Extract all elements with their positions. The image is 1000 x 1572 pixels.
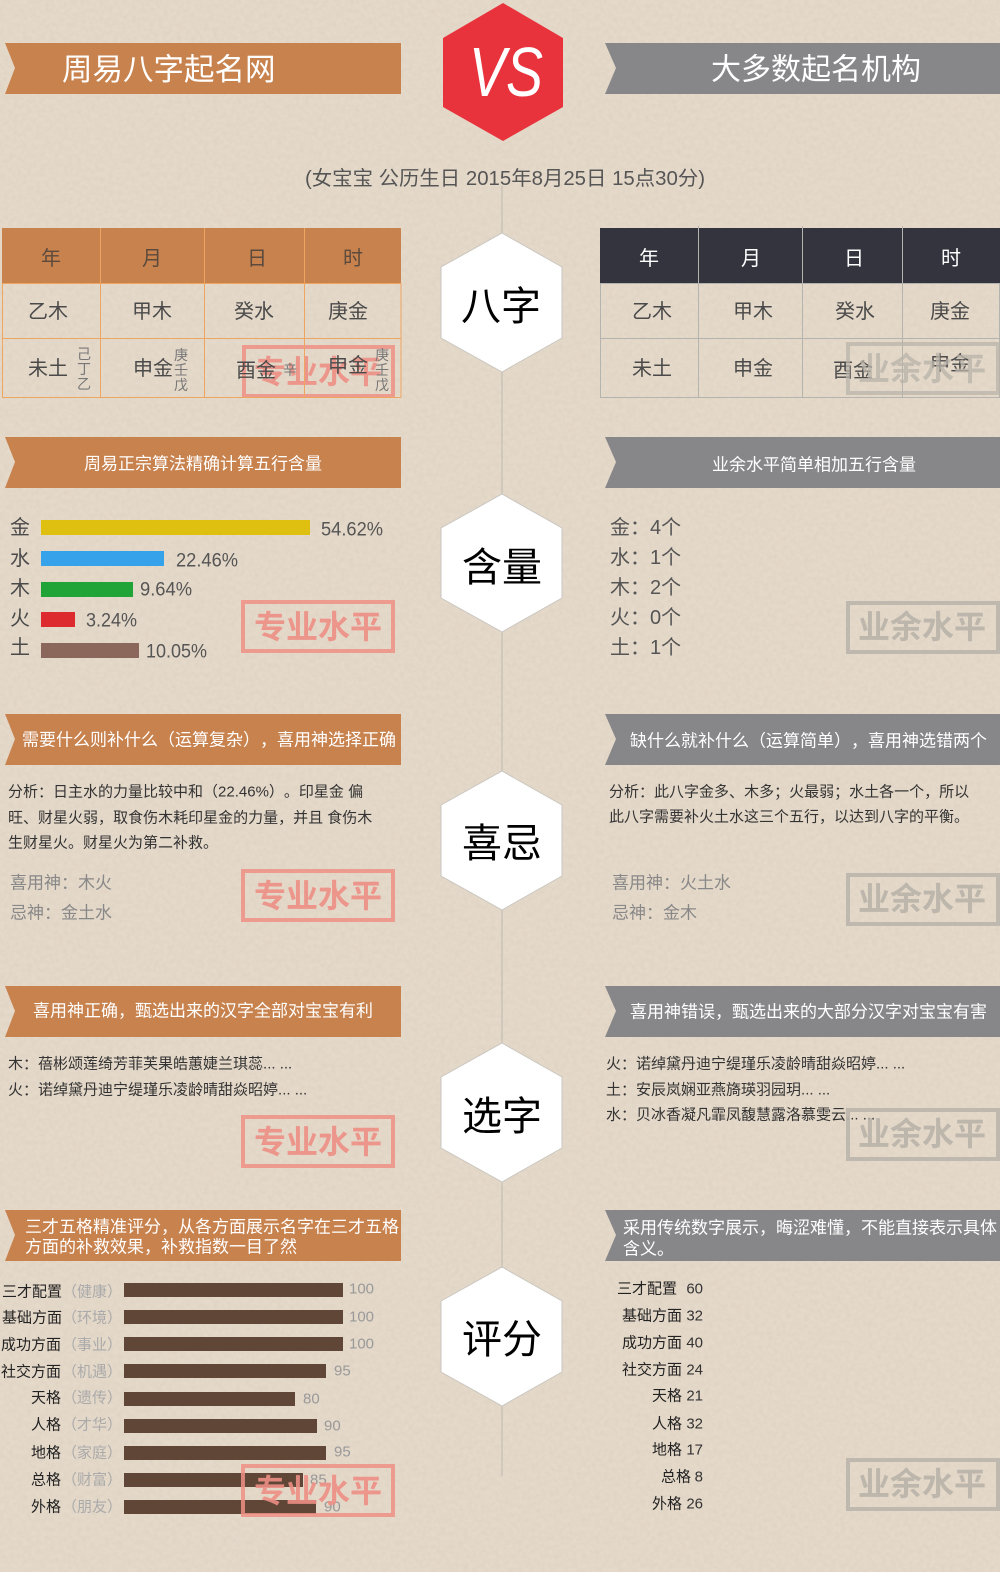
hexagon: 含量: 含量 bbox=[462, 546, 542, 590]
bar chart: five elements percent: 54.62% bbox=[321, 520, 383, 540]
list: traditional numeric scores: 三才配置 bbox=[617, 1280, 677, 1298]
panel: left bazi table: 乙 bbox=[77, 376, 91, 392]
stamp: 专业水平 bazi bbox=[244, 347, 393, 396]
panel: left bazi table: 时 bbox=[343, 247, 363, 270]
bar chart: five elements percent: 10.05% bbox=[146, 642, 207, 662]
banner: 需要什么则补什么: 需要什么则补什么（运算复杂），喜用神选择正确 bbox=[22, 730, 396, 750]
panel: left bazi table: 癸水 bbox=[234, 300, 274, 323]
panel: left bazi table: 庚 bbox=[174, 347, 188, 363]
list: traditional numeric scores: 天格 bbox=[652, 1388, 682, 1404]
bar chart: name scores: 地格 bbox=[31, 1444, 61, 1462]
bar chart: name scores: 100 bbox=[349, 1308, 374, 1326]
banner: 三才五格精准评分: 方面的补救效果，补救指数一目了然 bbox=[25, 1238, 297, 1256]
bar chart: name scores: （遗传） bbox=[62, 1390, 122, 1406]
text block: left analysis: 生财星火。财星火为第二补救。 bbox=[8, 834, 218, 852]
panel: right bazi table: 癸水 bbox=[835, 300, 875, 323]
bar chart: five elements percent: 金 bbox=[10, 516, 30, 539]
bar chart: name scores: 85 bbox=[310, 1472, 327, 1488]
subtitle: birth date: (女宝宝 公历生日 2015年8月25日 15点30分) bbox=[305, 167, 705, 190]
stamp: 业余水平 content: 业余水平 bbox=[858, 609, 986, 645]
banner: 喜用神正确 bbox=[5, 986, 401, 1037]
panel: left bazi table: 壬 bbox=[174, 362, 188, 378]
hexagon: 含量 bbox=[441, 494, 562, 632]
stamp: 专业水平 content: 专业水平 bbox=[254, 609, 382, 645]
panel: left bazi table bbox=[2, 228, 401, 398]
panel: right bazi table: 月 bbox=[741, 248, 761, 270]
list: traditional numeric scores: 24 bbox=[686, 1362, 703, 1378]
bar chart: name scores: （环境） bbox=[62, 1308, 122, 1326]
text block: left name characters: 木：蓓彬颂莲绮芳菲芙果皓蕙婕兰琪蕊... ... bbox=[8, 1056, 292, 1072]
panel: left bazi table: 申金 bbox=[133, 357, 173, 380]
bar chart: name scores: 90 bbox=[324, 1418, 341, 1434]
bar chart: name scores: （朋友） bbox=[62, 1498, 122, 1516]
bar chart: name scores: 100 bbox=[349, 1336, 374, 1352]
bar chart: name scores bbox=[1, 1280, 374, 1516]
panel: right bazi table: 申金 bbox=[930, 352, 970, 375]
hexagon: 八字: 八字 bbox=[461, 285, 541, 329]
panel: left bazi table: 丁 bbox=[77, 361, 91, 377]
stamp: 专业水平 bazi: 专业水平 bbox=[254, 354, 382, 390]
bar chart: name scores: （事业） bbox=[62, 1336, 122, 1354]
bar chart: name scores: （财富） bbox=[62, 1470, 122, 1488]
bar chart: name scores: 95 bbox=[334, 1362, 351, 1380]
bar chart: five elements percent: 火 bbox=[10, 608, 30, 630]
bar chart: name scores: 人格 bbox=[31, 1416, 61, 1434]
stamp: 业余水平 bazi bbox=[848, 344, 998, 393]
panel: left bazi table: 庚金 bbox=[328, 300, 368, 323]
text block: left analysis: 分析：日主水的力量比较中和（22.46%）。印星金 偏 bbox=[8, 782, 363, 800]
text block: right name characters: 土：安辰岚娴亚燕旖瑛羽园玥... ... bbox=[606, 1082, 830, 1098]
stamp: 业余水平 characters: 业余水平 bbox=[858, 1116, 986, 1152]
bar chart: five elements percent bbox=[10, 516, 383, 662]
hexagon: 喜忌: 喜忌 bbox=[462, 822, 542, 866]
banner: 周易正宗算法 bbox=[5, 437, 401, 488]
bar chart: five elements percent: 土 bbox=[10, 636, 30, 659]
bar chart: five elements percent: 木 bbox=[10, 577, 30, 600]
panel: left bazi table: 未土 bbox=[28, 357, 68, 380]
banner: 三才五格精准评分: 三才五格精准评分，从各方面展示名字在三才五格 bbox=[25, 1218, 399, 1236]
list: traditional numeric scores: 40 bbox=[686, 1334, 703, 1352]
list: simple five element counts bbox=[610, 516, 681, 659]
list: traditional numeric scores: 地格 bbox=[652, 1442, 682, 1458]
stamp: 专业水平 characters bbox=[243, 1117, 393, 1166]
bar chart: name scores: 基础方面 bbox=[2, 1310, 62, 1326]
header banner: 大多数起名机构 bbox=[605, 43, 1000, 94]
banner: 喜用神错误 bbox=[605, 986, 1000, 1037]
panel: left bazi table: 壬 bbox=[375, 362, 389, 378]
banner: 业余水平简单相加: 业余水平简单相加五行含量 bbox=[712, 456, 916, 474]
bar chart: name scores: 100 bbox=[349, 1280, 374, 1298]
text block: right name characters: 火：诺绰黛丹迪宁缇瑾乐凌龄晴甜焱昭婷... ... bbox=[606, 1056, 905, 1072]
hexagon: 评分 bbox=[441, 1267, 562, 1406]
list: traditional numeric scores: 基础方面 bbox=[622, 1308, 682, 1324]
list: traditional numeric scores: 成功方面 bbox=[622, 1334, 682, 1352]
text block: right analysis: 分析：此八字金多、木多；火最弱；水土各一个，所以 bbox=[609, 784, 969, 800]
list: simple five element counts: 木：2个 bbox=[610, 576, 681, 599]
text block: right analysis: 忌神：金木 bbox=[612, 904, 697, 922]
list: traditional numeric scores: 总格 bbox=[661, 1468, 691, 1486]
text block: left analysis bbox=[8, 782, 372, 922]
stamp: 业余水平 bazi: 业余水平 bbox=[858, 351, 986, 387]
panel: left bazi table: 月 bbox=[142, 248, 162, 270]
bar chart: name scores: 社交方面 bbox=[1, 1362, 61, 1380]
text block: left analysis: 忌神：金土水 bbox=[10, 904, 112, 922]
panel: left bazi table: 申金 bbox=[328, 354, 368, 377]
list: traditional numeric scores: 21 bbox=[686, 1388, 703, 1404]
panel: right bazi table: 甲木 bbox=[733, 300, 773, 323]
bar chart: name scores: （才华） bbox=[62, 1416, 122, 1434]
stamp: 业余水平 scores bbox=[848, 1460, 998, 1509]
bar chart: five elements percent: 22.46% bbox=[176, 550, 238, 572]
text block: right analysis: 喜用神：火土水 bbox=[612, 874, 731, 892]
panel: right bazi table: 日 bbox=[844, 248, 864, 270]
stamp: 专业水平 analysis bbox=[243, 871, 393, 920]
panel: right bazi table bbox=[600, 226, 1000, 398]
stamp: 业余水平 analysis: 业余水平 bbox=[858, 881, 986, 917]
panel: right bazi table: 庚金 bbox=[930, 300, 970, 323]
bar chart: name scores: 三才配置 bbox=[2, 1284, 62, 1300]
banner: 采用传统数字展示 bbox=[605, 1210, 1000, 1261]
hexagon: 评分: 评分 bbox=[462, 1318, 542, 1362]
hexagon: 喜忌 bbox=[441, 771, 562, 910]
stamp: 业余水平 content bbox=[848, 603, 998, 652]
bar chart: five elements percent: 水 bbox=[10, 547, 30, 570]
list: simple five element counts: 土：1个 bbox=[610, 636, 681, 659]
hexagon: 选字: 选字 bbox=[462, 1095, 542, 1139]
text block: right analysis: 此八字需要补火土水这三个五行，以达到八字的平衡。 bbox=[609, 808, 969, 826]
panel: left bazi table: 乙木 bbox=[28, 300, 68, 323]
bar chart: name scores: 总格 bbox=[31, 1472, 61, 1488]
header banner: 周易八字起名网 bbox=[5, 43, 401, 94]
bar chart: name scores: （家庭） bbox=[62, 1444, 122, 1462]
panel: right bazi table: 酉金 bbox=[833, 359, 873, 382]
panel: left bazi table: 年 bbox=[41, 247, 61, 270]
header banner: 大多数起名机构: 大多数起名机构 bbox=[711, 54, 921, 86]
VS red hexagon badge bbox=[443, 3, 563, 141]
list: simple five element counts: 金：4个 bbox=[610, 516, 681, 539]
list: traditional numeric scores: 60 bbox=[686, 1280, 703, 1298]
bar chart: name scores: （健康） bbox=[62, 1284, 122, 1300]
list: traditional numeric scores: 32 bbox=[686, 1416, 703, 1432]
list: traditional numeric scores: 社交方面 bbox=[622, 1360, 682, 1378]
list: traditional numeric scores: 人格 bbox=[652, 1416, 682, 1432]
bar chart: name scores: 80 bbox=[303, 1390, 320, 1408]
bar chart: name scores: 90 bbox=[324, 1498, 341, 1516]
panel: right bazi table: 申金 bbox=[733, 357, 773, 380]
text block: left analysis: 喜用神：木火 bbox=[10, 874, 112, 892]
text block: right name characters: 水：贝冰香凝凡霏凤馥慧露洛慕雯云... ... bbox=[606, 1106, 875, 1124]
text block: left analysis: 旺、财星火弱，取食伤木耗印星金的力量，并且 食伤木 bbox=[8, 810, 372, 826]
banner: 采用传统数字展示: 采用传统数字展示，晦涩难懂，不能直接表示具体 bbox=[623, 1218, 997, 1238]
stamp: 专业水平 content bbox=[243, 602, 393, 651]
bar chart: five elements percent: 3.24% bbox=[86, 610, 137, 632]
hexagon: 八字 bbox=[441, 233, 562, 372]
banner: 缺什么就补什么 bbox=[605, 714, 1000, 765]
bar chart: name scores: 成功方面 bbox=[1, 1336, 61, 1354]
banner: 需要什么则补什么 bbox=[5, 714, 401, 765]
bar chart: name scores: 95 bbox=[334, 1444, 351, 1460]
list: traditional numeric scores: 8 bbox=[695, 1468, 703, 1486]
panel: left bazi table: 戊 bbox=[375, 377, 389, 393]
header banner: 周易八字起名网: 周易八字起名网 bbox=[62, 53, 276, 87]
panel: left bazi table: 庚 bbox=[375, 347, 389, 363]
text block: left name characters: 火：诺绰黛丹迪宁缇瑾乐凌龄晴甜焱昭婷... ... bbox=[8, 1082, 307, 1098]
list: traditional numeric scores: 32 bbox=[686, 1308, 703, 1324]
list: traditional numeric scores bbox=[617, 1280, 703, 1512]
panel: left bazi table: 酉金 bbox=[236, 359, 276, 382]
banner: 三才五格精准评分 bbox=[5, 1210, 401, 1261]
panel: left bazi table: 甲木 bbox=[132, 300, 172, 323]
panel: right bazi table: 时 bbox=[941, 247, 961, 270]
stamp: 业余水平 analysis bbox=[848, 875, 998, 924]
panel: right bazi table: 乙木 bbox=[632, 300, 672, 323]
VS red hexagon badge: VS bbox=[469, 33, 543, 111]
text block: right analysis bbox=[609, 784, 969, 922]
banner: 缺什么就补什么: 缺什么就补什么（运算简单），喜用神选错两个 bbox=[630, 732, 987, 750]
stamp: 专业水平 characters: 专业水平 bbox=[254, 1124, 382, 1160]
panel: right bazi table: 年 bbox=[639, 247, 659, 270]
bar chart: name scores: （机遇） bbox=[62, 1364, 122, 1380]
stamp: 专业水平 analysis: 专业水平 bbox=[254, 878, 382, 914]
bar chart: name scores: 外格 bbox=[31, 1498, 61, 1516]
bar chart: five elements percent: 9.64% bbox=[140, 580, 192, 600]
bar chart: name scores: 天格 bbox=[31, 1390, 61, 1406]
stamp: 专业水平 scores: 专业水平 bbox=[254, 1473, 382, 1509]
text block: right name characters bbox=[606, 1056, 905, 1124]
banner: 喜用神错误: 喜用神错误，甄选出来的大部分汉字对宝宝有害 bbox=[630, 1002, 987, 1022]
banner: 喜用神正确: 喜用神正确，甄选出来的汉字全部对宝宝有利 bbox=[33, 1002, 373, 1020]
list: simple five element counts: 火：0个 bbox=[610, 606, 681, 629]
stamp: 业余水平 characters bbox=[848, 1110, 998, 1159]
list: traditional numeric scores: 26 bbox=[686, 1496, 703, 1512]
stamp: 专业水平 scores bbox=[243, 1466, 393, 1515]
banner: 周易正宗算法: 周易正宗算法精确计算五行含量 bbox=[84, 454, 322, 474]
panel: left bazi table: 己 bbox=[77, 346, 91, 362]
hexagon: 选字 bbox=[441, 1043, 562, 1182]
panel: left bazi table: 辛 bbox=[283, 362, 297, 378]
list: traditional numeric scores: 17 bbox=[686, 1442, 703, 1458]
panel: left bazi table: 戊 bbox=[174, 377, 188, 393]
panel: left bazi table: 日 bbox=[247, 248, 267, 270]
banner: 业余水平简单相加 bbox=[605, 437, 1000, 488]
text block: left name characters bbox=[8, 1056, 307, 1098]
list: traditional numeric scores: 外格 bbox=[652, 1496, 682, 1512]
list: simple five element counts: 水：1个 bbox=[610, 546, 681, 569]
banner: 采用传统数字展示: 含义。 bbox=[623, 1240, 674, 1258]
stamp: 业余水平 scores: 业余水平 bbox=[858, 1466, 986, 1502]
panel: right bazi table: 未土 bbox=[632, 357, 672, 380]
